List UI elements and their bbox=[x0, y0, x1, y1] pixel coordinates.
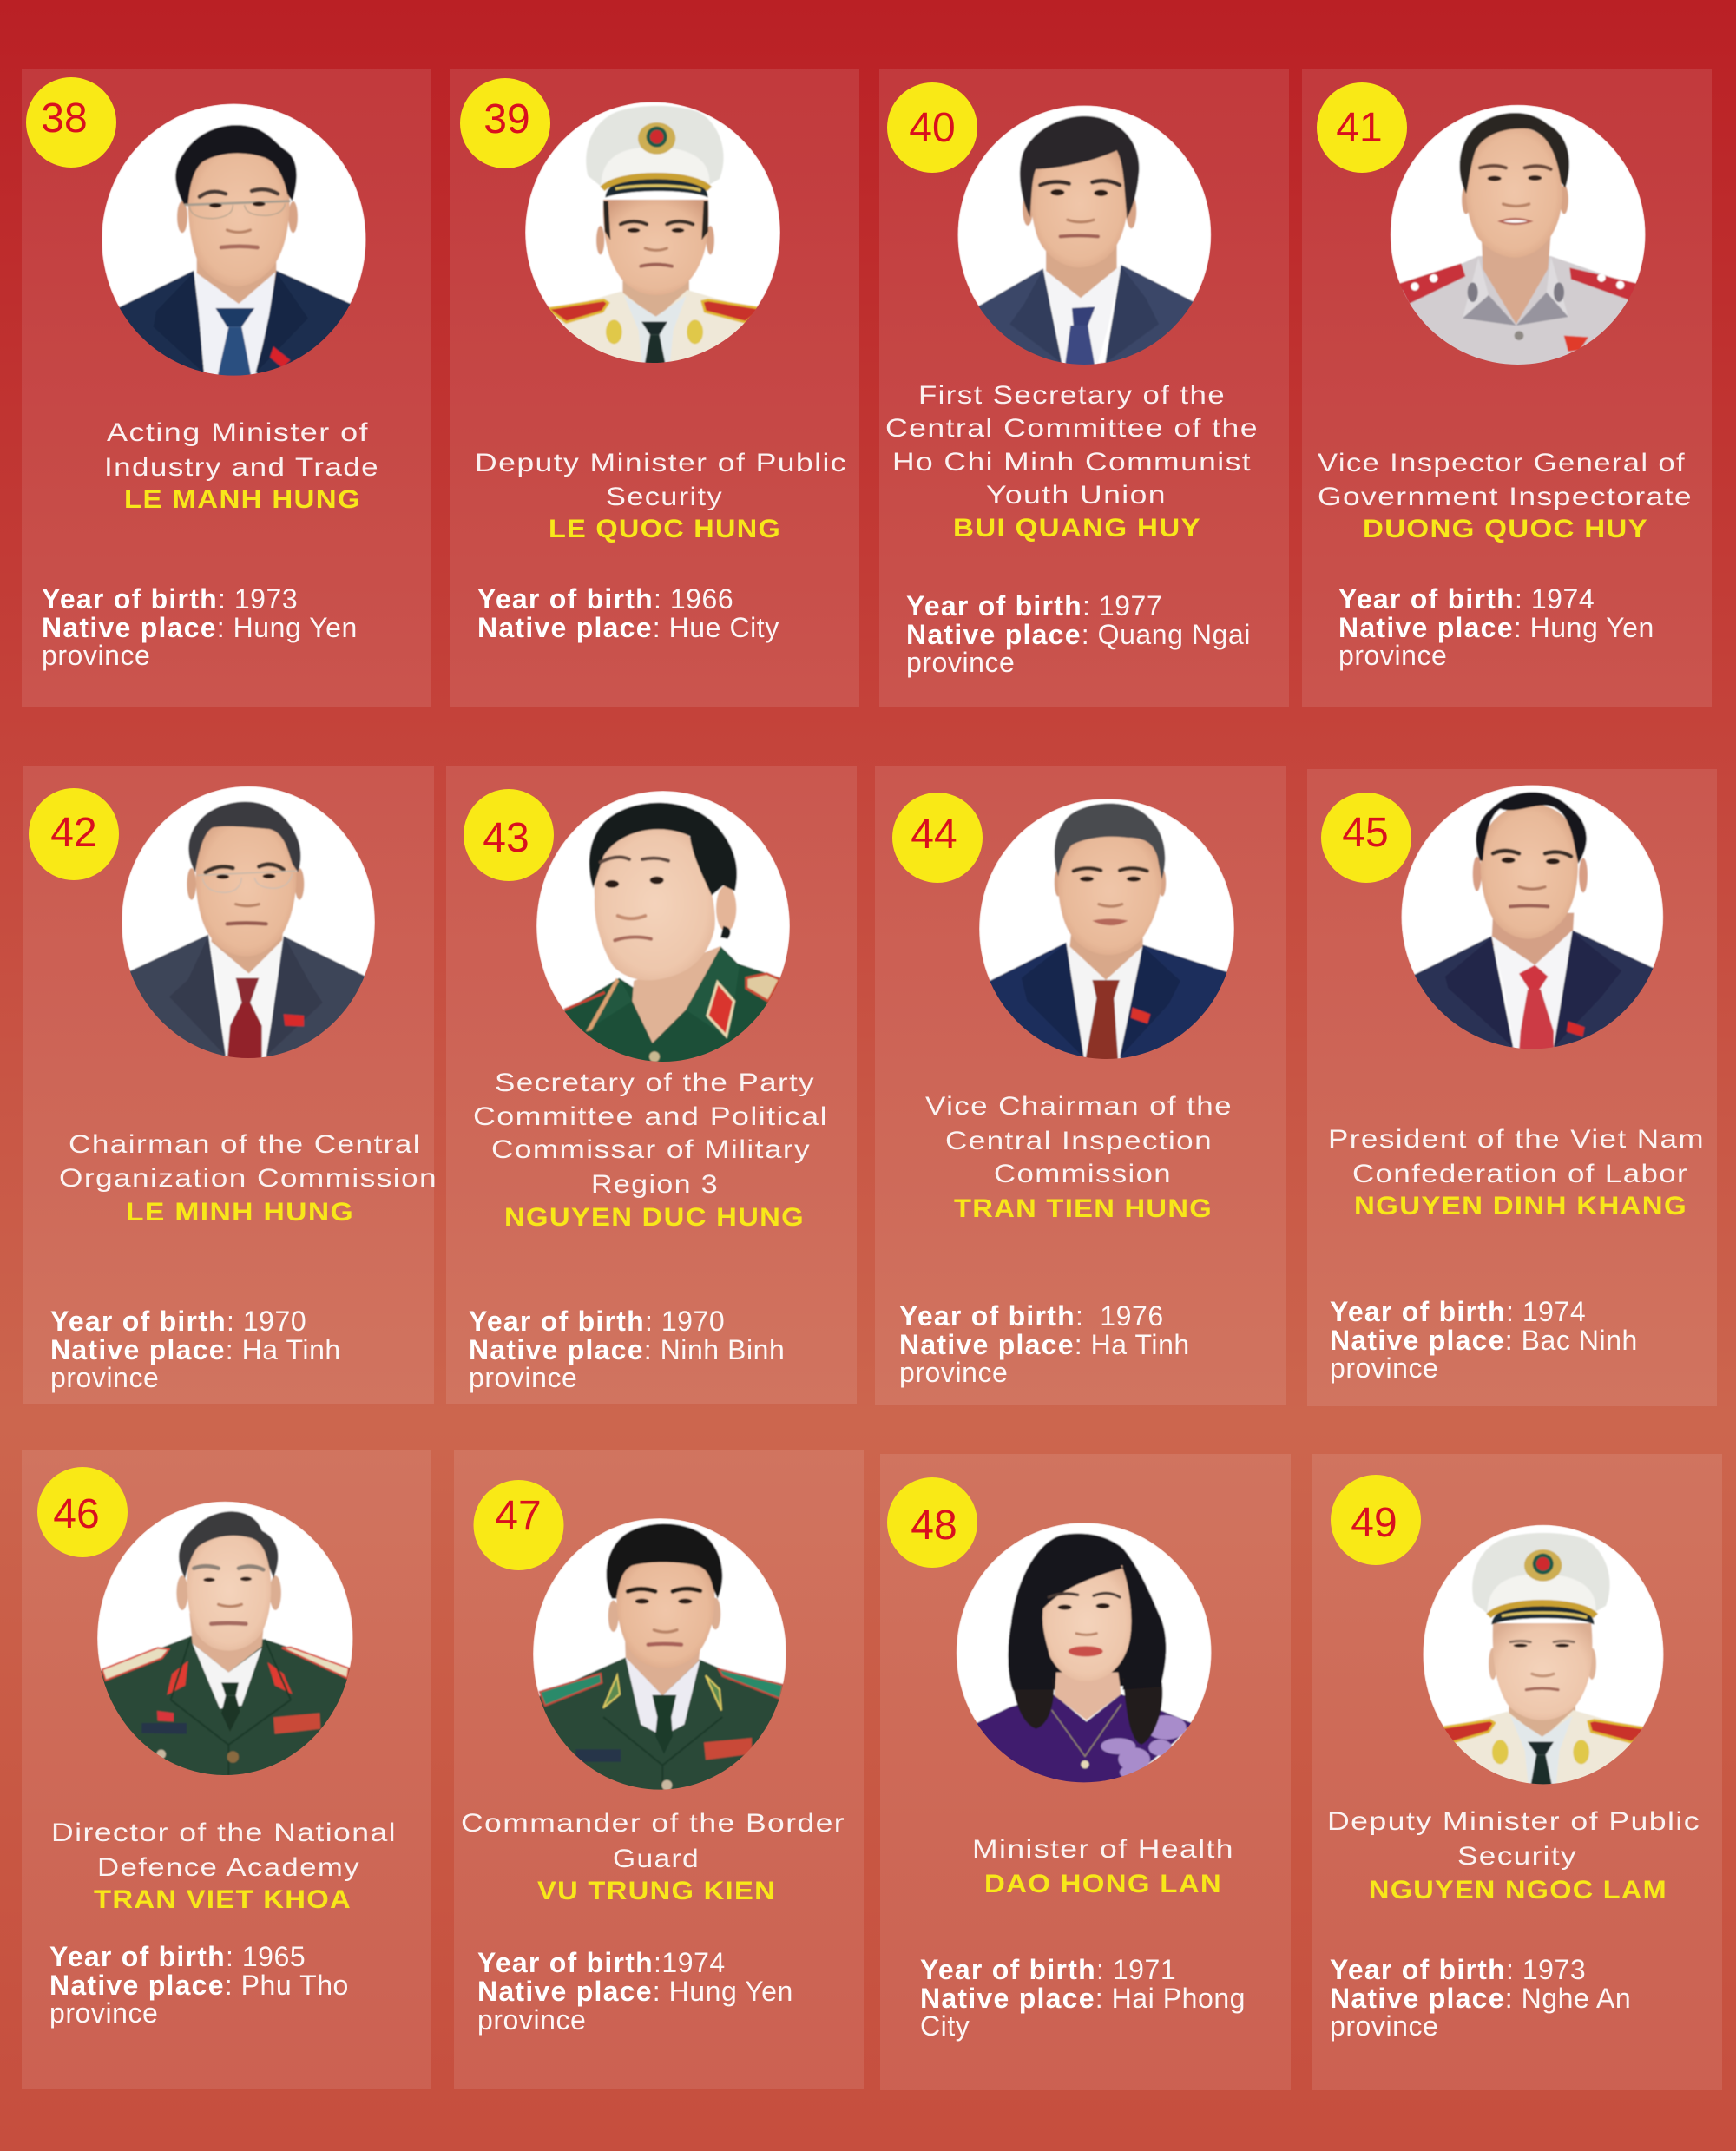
panel: official 39 bbox=[450, 69, 859, 707]
details 46: Native place: Phu Tho bbox=[49, 1970, 349, 2001]
badge 38: 38 bbox=[41, 95, 88, 141]
panel: official 43 bbox=[446, 766, 857, 1404]
card 42 background bbox=[23, 766, 434, 1404]
name 40: BUI QUANG HUY bbox=[953, 514, 1201, 543]
details 43: Year of birth: 1970 bbox=[469, 1306, 725, 1337]
badge 39 bbox=[460, 78, 550, 168]
title 41: Vice Inspector General of bbox=[1318, 449, 1686, 477]
title 49: Deputy Minister of Public bbox=[1327, 1807, 1700, 1836]
title 44 bbox=[925, 1092, 1233, 1188]
details 48: Native place: Hai Phong bbox=[920, 1983, 1246, 2014]
details 49: Native place: Nghe An bbox=[1330, 1983, 1631, 2014]
title 40: Youth Union bbox=[986, 481, 1167, 510]
details 38: Year of birth: 1973 bbox=[42, 583, 298, 615]
details 43 bbox=[469, 1306, 785, 1393]
title 47: Guard bbox=[613, 1845, 700, 1873]
title 38: Acting Minister of bbox=[107, 418, 369, 447]
card 38 background bbox=[22, 69, 431, 707]
title 43: Region 3 bbox=[591, 1170, 719, 1199]
title 45: Confederation of Labor bbox=[1352, 1160, 1688, 1188]
badge 45 bbox=[1321, 793, 1411, 883]
details 45: Native place: Bac Ninh bbox=[1330, 1325, 1638, 1356]
badge 41 bbox=[1317, 82, 1407, 173]
title 44: Central Inspection bbox=[945, 1127, 1213, 1155]
panel: official 38 bbox=[22, 69, 431, 707]
name 43: NGUYEN DUC HUNG bbox=[504, 1203, 805, 1232]
title 45 bbox=[1328, 1125, 1705, 1188]
details 39 bbox=[477, 583, 779, 643]
panel: official 41 bbox=[1302, 69, 1712, 707]
card 49 background bbox=[1312, 1454, 1722, 2090]
card 40 background bbox=[879, 69, 1289, 707]
name 38: LE MANH HUNG bbox=[124, 485, 361, 514]
card 48 background bbox=[880, 1454, 1291, 2090]
details 47: Native place: Hung Yen bbox=[477, 1976, 793, 2007]
badge 49 bbox=[1331, 1475, 1421, 1565]
title 43: Commissar of Military bbox=[491, 1135, 811, 1164]
badge 48: 48 bbox=[911, 1503, 957, 1549]
details 40: Native place: Quang Ngai bbox=[906, 619, 1251, 650]
title 38: Industry and Trade bbox=[104, 453, 379, 482]
details 49 bbox=[1330, 1954, 1631, 2042]
portrait 44 bbox=[979, 799, 1234, 1062]
badge 47: 47 bbox=[495, 1493, 542, 1539]
portrait 45 bbox=[1401, 785, 1663, 1052]
badge 46 bbox=[37, 1467, 128, 1557]
name 48: DAO HONG LAN bbox=[984, 1870, 1222, 1898]
title 43 bbox=[473, 1069, 828, 1199]
card 45 background bbox=[1307, 769, 1717, 1406]
details 47 bbox=[477, 1947, 793, 2036]
details 43: Native place: Ninh Binh bbox=[469, 1334, 785, 1365]
name 49: NGUYEN NGOC LAM bbox=[1369, 1876, 1667, 1904]
title 40: Central Committee of the bbox=[885, 414, 1259, 443]
title 41 bbox=[1318, 449, 1693, 511]
title 39: Security bbox=[606, 483, 723, 511]
badge 48 bbox=[887, 1477, 977, 1568]
title 39: Deputy Minister of Public bbox=[475, 449, 847, 477]
portrait 47 bbox=[533, 1518, 788, 1792]
portrait 48 bbox=[957, 1523, 1212, 1786]
details 48: Year of birth: 1971 bbox=[920, 1954, 1176, 1985]
details 42: Year of birth: 1970 bbox=[50, 1306, 306, 1337]
details 40: province bbox=[906, 647, 1015, 678]
details 47: province bbox=[477, 2004, 586, 2036]
details 38: Native place: Hung Yen bbox=[42, 612, 358, 643]
card 47 background bbox=[454, 1450, 864, 2089]
details 42 bbox=[50, 1306, 341, 1393]
details 46: province bbox=[49, 1997, 158, 2029]
portrait 43 bbox=[536, 791, 790, 1065]
badge 40 bbox=[887, 82, 977, 173]
title 49 bbox=[1327, 1807, 1700, 1871]
portrait 49 bbox=[1423, 1525, 1664, 1794]
title 43: Committee and Political bbox=[473, 1102, 828, 1131]
details 42: Native place: Ha Tinh bbox=[50, 1334, 341, 1365]
panel: official 47 bbox=[454, 1450, 864, 2089]
name 42: LE MINH HUNG bbox=[126, 1198, 354, 1227]
details 47: Year of birth:1974 bbox=[477, 1947, 726, 1978]
badge 47 bbox=[474, 1480, 564, 1570]
name 41: DUONG QUOC HUY bbox=[1363, 515, 1648, 543]
details 48 bbox=[920, 1954, 1246, 2042]
panel: official 44 bbox=[875, 766, 1286, 1405]
panel: official 49 bbox=[1312, 1454, 1722, 2090]
details 45: Year of birth: 1974 bbox=[1330, 1296, 1586, 1327]
details 49: Year of birth: 1973 bbox=[1330, 1954, 1586, 1985]
title 42 bbox=[59, 1130, 437, 1193]
portrait 38 bbox=[102, 103, 366, 379]
badge 42: 42 bbox=[50, 810, 97, 856]
title 41: Government Inspectorate bbox=[1318, 483, 1693, 511]
title 42: Chairman of the Central bbox=[69, 1130, 421, 1159]
details 44: province bbox=[899, 1357, 1008, 1388]
portrait 46 bbox=[97, 1502, 354, 1778]
title 39 bbox=[475, 449, 847, 511]
details 39: Year of birth: 1966 bbox=[477, 583, 733, 615]
portrait 40 bbox=[957, 105, 1211, 367]
details 41: Year of birth: 1974 bbox=[1338, 583, 1595, 615]
badge 41: 41 bbox=[1336, 105, 1383, 151]
card 44 background bbox=[875, 766, 1286, 1405]
name 46: TRAN VIET KHOA bbox=[94, 1885, 352, 1914]
title 40: Ho Chi Minh Communist bbox=[892, 448, 1252, 477]
card 41 background bbox=[1302, 69, 1712, 707]
details 44: Native place: Ha Tinh bbox=[899, 1329, 1190, 1360]
details 40 bbox=[906, 590, 1251, 678]
portrait 39 bbox=[525, 102, 780, 374]
details 44: Year of birth: 1976 bbox=[899, 1300, 1164, 1332]
details 40: Year of birth: 1977 bbox=[906, 590, 1162, 622]
panel: official 45 bbox=[1307, 769, 1717, 1406]
title 46 bbox=[51, 1819, 397, 1882]
badge 44: 44 bbox=[911, 812, 957, 858]
details 38 bbox=[42, 583, 358, 671]
details 45 bbox=[1330, 1296, 1638, 1384]
name 45: NGUYEN DINH KHANG bbox=[1354, 1192, 1687, 1220]
details 42: province bbox=[50, 1362, 159, 1393]
title 49: Security bbox=[1457, 1842, 1577, 1871]
badge 39: 39 bbox=[483, 96, 530, 142]
badge 49: 49 bbox=[1351, 1500, 1397, 1546]
title 46: Director of the National bbox=[51, 1819, 397, 1847]
badge 45: 45 bbox=[1342, 810, 1389, 856]
title 40: First Secretary of the bbox=[918, 381, 1226, 410]
badge 43: 43 bbox=[483, 815, 529, 861]
details 46: Year of birth: 1965 bbox=[49, 1941, 306, 1972]
title 40 bbox=[885, 381, 1259, 510]
badge 38 bbox=[26, 77, 116, 168]
details 48: City bbox=[920, 2010, 970, 2042]
details 38: province bbox=[42, 640, 150, 671]
portrait 42 bbox=[122, 786, 375, 1061]
title 46: Defence Academy bbox=[97, 1853, 360, 1882]
details 41 bbox=[1338, 583, 1654, 671]
badge 43 bbox=[464, 789, 554, 881]
details 49: province bbox=[1330, 2010, 1438, 2042]
card 46 background bbox=[22, 1450, 431, 2089]
panel: official 48 bbox=[880, 1454, 1291, 2090]
title 47: Commander of the Border bbox=[461, 1809, 845, 1838]
title 45: President of the Viet Nam bbox=[1328, 1125, 1705, 1154]
badge 46: 46 bbox=[53, 1491, 100, 1537]
title 44: Commission bbox=[994, 1160, 1172, 1188]
details 41: Native place: Hung Yen bbox=[1338, 612, 1654, 643]
badge 42 bbox=[29, 788, 119, 880]
badge 44 bbox=[892, 793, 983, 883]
name 44: TRAN TIEN HUNG bbox=[954, 1194, 1213, 1223]
details 44 bbox=[899, 1300, 1190, 1388]
title 42: Organization Commission bbox=[59, 1164, 437, 1193]
details 46 bbox=[49, 1941, 349, 2029]
portrait 41 bbox=[1391, 105, 1647, 367]
title 44: Vice Chairman of the bbox=[925, 1092, 1233, 1121]
title 43: Secretary of the Party bbox=[495, 1069, 815, 1097]
badge 40: 40 bbox=[909, 105, 956, 151]
panel: official 40 bbox=[879, 69, 1289, 707]
title 48: Minister of Health bbox=[972, 1835, 1234, 1864]
details 39: Native place: Hue City bbox=[477, 612, 779, 643]
details 43: province bbox=[469, 1362, 577, 1393]
details 41: province bbox=[1338, 640, 1447, 671]
name 39: LE QUOC HUNG bbox=[549, 515, 781, 543]
panel: official 42 bbox=[23, 766, 437, 1404]
title 47 bbox=[461, 1809, 845, 1873]
panel: official 46 bbox=[22, 1450, 431, 2089]
card 39 background bbox=[450, 69, 859, 707]
name 47: VU TRUNG KIEN bbox=[537, 1877, 776, 1905]
title 38 bbox=[104, 418, 379, 482]
card 43 background bbox=[446, 766, 857, 1404]
details 45: province bbox=[1330, 1352, 1438, 1384]
